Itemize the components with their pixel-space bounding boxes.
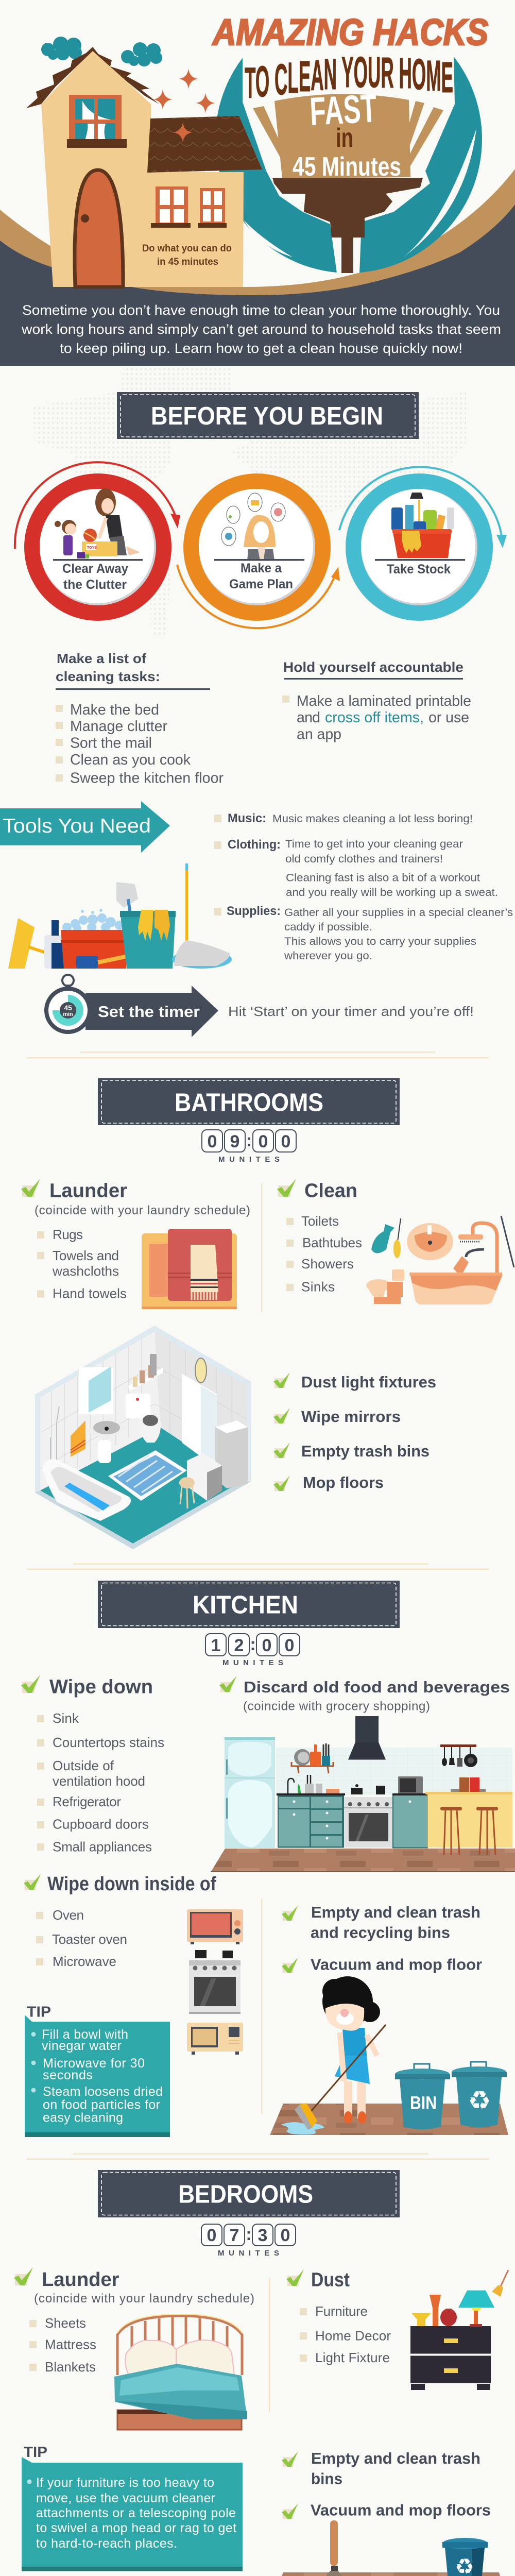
timer: 12:00 minutes: 1 [211, 1636, 220, 1655]
heading: bathrooms: BATHROOMS [175, 1089, 323, 1117]
cabinets [278, 1795, 344, 1848]
step: make a game plan [177, 473, 340, 628]
timer: 09:00 minutes: : [246, 1131, 252, 1150]
counter objects [288, 1778, 294, 1794]
list: tools: Supplies: [227, 904, 281, 918]
panel: launder (bathrooms): Launder [49, 1180, 127, 1201]
panel: wipe down inside of: Microwave [53, 1954, 116, 1969]
illustration: house [26, 37, 262, 287]
tip: vacuum attachments [22, 2444, 243, 2571]
list: tools [214, 811, 513, 962]
illustration: woman and child: TOYS [87, 546, 97, 550]
timer: 09:00 minutes [202, 1130, 296, 1164]
tip: vacuum attachments: to swivel a mop head or rag to get [36, 2521, 236, 2535]
illustration: isometric bathroom [35, 1326, 251, 1549]
list: kitchen chores: Vacuum and mop floor [311, 1956, 482, 1974]
step: clear away the clutter: the Clutter [63, 578, 127, 592]
panel: wipe down inside of: Wipe down inside of [47, 1873, 216, 1895]
step: take stock [339, 467, 507, 621]
panel: launder (bedrooms): Sheets [45, 2315, 86, 2331]
list: tools: Time to get into your cleaning gear [285, 838, 463, 850]
tip: microwave: easy cleaning [43, 2111, 123, 2125]
legs [344, 2081, 352, 2119]
illustration: woman and child [55, 488, 140, 558]
tip: microwave: TIP [27, 2004, 51, 2021]
intro text: to keep piling up. Learn how to get a clean house quickly now! [60, 341, 462, 356]
panel: discard old food: (coincide with grocery shopping) [243, 1699, 430, 1714]
timer: 07:30 minutes: MUNITES [218, 2249, 279, 2258]
arrow: tools you need: Tools You Need [3, 815, 151, 837]
list: tools: caddy if possible. [284, 921, 372, 933]
panel: make a list of cleaning tasks: Make the bed [70, 702, 159, 718]
panel: make a list of cleaning tasks: Make a list of [57, 651, 146, 666]
list: bathroom chores [273, 1372, 436, 1492]
panel: launder (bathrooms): Rugs [53, 1227, 83, 1242]
list: bedroom chores: Vacuum and mop floors [311, 2501, 491, 2519]
sink and towel [85, 1418, 128, 1440]
tip: microwave: Microwave for 30 [43, 2056, 145, 2071]
shelf [291, 1762, 333, 1773]
dotted world map backdrop [31, 367, 466, 637]
panel: wipe down inside of: Oven [53, 1907, 84, 1923]
bin: BIN [410, 2093, 437, 2113]
tip: microwave: vinegar water [42, 2039, 122, 2053]
panel: clean (bathrooms): Clean [304, 1180, 357, 1201]
list: bathroom chores: Wipe mirrors [301, 1408, 401, 1426]
dress [335, 2028, 369, 2081]
list: tools: old comfy clothes and trainers! [285, 853, 443, 865]
timer: 09:00 minutes: 9 [230, 1132, 239, 1151]
heading: bedrooms: BEDROOMS [178, 2180, 313, 2208]
heading: bathrooms [98, 1078, 400, 1125]
panel: clean (bathrooms): Toilets [301, 1213, 339, 1229]
list: bathroom chores: Empty trash bins [301, 1442, 430, 1460]
panel: clean (bathrooms): Sinks [301, 1279, 335, 1294]
icon: microwave [187, 2023, 243, 2055]
list: tools: Gather all your supplies in a special cleaner’s [284, 906, 513, 919]
illustration: mop and bin on wood floor [270, 2520, 508, 2576]
tip: microwave: on food particles for [43, 2098, 160, 2112]
panel: dust (bedrooms): Dust [311, 2269, 350, 2291]
recycle bin [452, 2062, 507, 2127]
panel: hold yourself accountable: or use [428, 709, 469, 726]
panel: make a list of cleaning tasks [56, 651, 224, 787]
list: tools: Cleaning fast is also a bit of a workout [286, 872, 480, 884]
title: in [336, 123, 353, 153]
panel: launder (bathrooms): (coincide with your laundry schedule) [35, 1204, 250, 1217]
list: bedroom chores: Empty and clean trash [311, 2449, 480, 2467]
timer: 12:00 minutes [205, 1634, 300, 1667]
timer: 09:00 minutes: 0 [281, 1132, 290, 1151]
illustration: bucket of cleaning supplies [391, 493, 454, 558]
door [75, 170, 123, 287]
panel: hold yourself accountable: Make a laminated printable [297, 693, 471, 709]
toilet [126, 1394, 150, 1418]
panel: launder (bathrooms) [21, 1179, 250, 1309]
panel: wipe down: Outside of [53, 1758, 114, 1773]
panel: clean (bathrooms): Showers [301, 1256, 354, 1272]
list: kitchen chores: and recycling bins [311, 1924, 450, 1941]
icon: stopwatch and set the timer arrow [44, 975, 218, 1037]
timer: 07:30 minutes: 0 [281, 2226, 290, 2245]
panel: wipe down inside of: Toaster oven [52, 1931, 127, 1947]
heading: before you begin: BEFORE YOU BEGIN [151, 402, 383, 430]
panel: make a list of cleaning tasks: Clean as you cook [70, 752, 191, 768]
house caption: Do what you can do [142, 243, 232, 254]
panel: wipe down inside of [24, 1873, 243, 2055]
timer: 09:00 minutes: MUNITES [218, 1155, 280, 1164]
panel: hold yourself accountable [282, 659, 471, 743]
heading: kitchen [98, 1581, 400, 1628]
panel: launder (bathrooms): Hand towels [53, 1286, 127, 1301]
panel: hold yourself accountable: and [297, 709, 320, 726]
step: clear away the clutter [15, 462, 180, 621]
intro text: work long hours and simply can’t get around to household tasks that seem [21, 321, 501, 337]
title: AMAZING HACKS [212, 12, 488, 53]
step: make a game plan: Make a [241, 561, 282, 575]
list: kitchen chores: Empty and clean trash [311, 1903, 480, 1921]
illustration: bathroom fixtures [366, 1216, 514, 1304]
panel: discard old food: Discard old food and beverages [244, 1678, 510, 1696]
panel: launder (bedrooms) [14, 2267, 254, 2430]
panel: hold yourself accountable: Hold yourself accountable [283, 659, 464, 675]
hood [355, 1716, 379, 1742]
intro text [21, 302, 501, 356]
recycle bin: ♻ [468, 2086, 491, 2115]
lower windows [156, 187, 188, 224]
tip: vacuum attachments: attachments or a telescoping pole [36, 2506, 236, 2520]
panel: launder (bathrooms): washcloths [52, 1263, 119, 1279]
panel: dust (bedrooms): Light Fixture [315, 2350, 390, 2365]
list: bathroom chores: Dust light fixtures [301, 1373, 436, 1391]
timer: 07:30 minutes: 7 [230, 2226, 239, 2245]
timer: 12:00 minutes: 0 [285, 1636, 294, 1655]
panel: dust (bedrooms): Furniture [315, 2303, 368, 2319]
title [212, 12, 488, 182]
panel: launder (bedrooms): (coincide with your laundry schedule) [34, 2292, 254, 2306]
timer: 07:30 minutes: : [246, 2225, 252, 2244]
fridge [225, 1737, 275, 1848]
head [322, 1976, 373, 2027]
illustration: woman mopping with bins [270, 1976, 508, 2135]
list: tools: This allows you to carry your supplies [284, 935, 476, 947]
panel: clean (bathrooms): Bathtubes [302, 1235, 362, 1250]
tip: microwave: Steam loosens dried [43, 2084, 163, 2099]
icon: stopwatch and set the timer arrow: Set the timer [98, 1003, 200, 1021]
tip: vacuum attachments: If your furniture is too heavy to [36, 2476, 214, 2490]
panel: hold yourself accountable: an app [297, 726, 341, 743]
timer: 07:30 minutes: 0 [207, 2226, 216, 2245]
panel: wipe down: Countertops stains [53, 1735, 164, 1750]
step: take stock: Take Stock [387, 562, 451, 577]
timer: 09:00 minutes: 0 [259, 1132, 268, 1151]
step: make a game plan: Game Plan [229, 577, 293, 591]
panel: wipe down: Sink [53, 1710, 79, 1726]
illustration: woman with thought bubbles [221, 493, 285, 561]
bin [395, 2064, 450, 2129]
illustration: folded towels [142, 1229, 237, 1309]
list: tools: Clothing: [228, 838, 281, 852]
icon: toaster oven [187, 1909, 243, 1944]
tip: vacuum attachments: move, use the vacuum cleaner [36, 2491, 215, 2505]
tip: vacuum attachments: to hard-to-reach places. [36, 2536, 177, 2551]
illustration: nightstand [410, 2270, 508, 2390]
panel: dust (bedrooms) [286, 2269, 508, 2390]
clouds [41, 37, 162, 66]
panel: hold yourself accountable: cross off items, [325, 709, 424, 726]
heading: kitchen: KITCHEN [193, 1591, 298, 1619]
house caption: in 45 minutes [157, 257, 218, 267]
window and shelf [79, 1367, 113, 1414]
panel: wipe down: Refrigerator [53, 1794, 121, 1809]
timer: 12:00 minutes: MUNITES [222, 1658, 283, 1667]
list: bedroom chores: bins [311, 2470, 342, 2488]
panel: make a list of cleaning tasks: Sort the mail [70, 735, 152, 751]
timer: 12:00 minutes: 2 [234, 1636, 244, 1655]
panel: launder (bedrooms): Blankets [45, 2359, 96, 2375]
list: bathroom chores: Mop floors [303, 1473, 384, 1492]
rug [108, 1450, 187, 1501]
panel: wipe down: ventilation hood [53, 1773, 145, 1789]
stool [179, 1477, 195, 1488]
bar and stools [427, 1793, 512, 1848]
illustration: kitchen [211, 1716, 515, 1872]
list: tools: and you really will be working up a sweat. [286, 886, 498, 899]
timer: 12:00 minutes: : [250, 1635, 256, 1654]
timer: 07:30 minutes: 3 [258, 2226, 267, 2245]
stove [344, 1797, 392, 1848]
panel: wipe down: Small appliances [53, 1839, 152, 1855]
bathtub [42, 1459, 131, 1521]
house caption [142, 243, 232, 267]
upper window [69, 95, 122, 142]
icon: stopwatch and set the timer arrow: 45 [64, 1004, 72, 1012]
hero background band [0, 169, 515, 366]
panel: discard old food [219, 1676, 510, 1714]
text: hit start: Hit ‘Start’ on your timer and you’re off! [228, 1004, 474, 1019]
icon: stopwatch and set the timer arrow: min [63, 1011, 73, 1018]
illustration: cleaning supplies [8, 863, 232, 969]
panel: clean (bathrooms) [277, 1179, 514, 1304]
icon: oven [189, 1950, 241, 2014]
utensil rack [440, 1744, 476, 1747]
intro text: Sometime you don’t have enough time to clean your home thoroughly. You [22, 302, 500, 318]
list: tools: Music: [228, 811, 266, 825]
timer: 07:30 minutes [201, 2224, 296, 2258]
heading: bedrooms [98, 2170, 400, 2217]
title: 45 Minutes [293, 152, 401, 182]
panel: wipe down: Wipe down [49, 1676, 153, 1698]
panel: make a list of cleaning tasks: cleaning tasks: [56, 669, 160, 684]
panel: launder (bedrooms): Mattress [45, 2337, 96, 2352]
heading: before you begin [117, 392, 419, 439]
timer: 12:00 minutes: 0 [262, 1636, 271, 1655]
list: tools: wherever you go. [284, 950, 372, 962]
tip: vacuum attachments: TIP [24, 2444, 47, 2461]
tip: microwave: seconds [43, 2068, 93, 2082]
step: clear away the clutter: Clear Away [62, 562, 128, 576]
list: kitchen chores [282, 1903, 482, 1974]
timer: 09:00 minutes: 0 [208, 1132, 217, 1151]
panel: make a list of cleaning tasks: Sweep the kitchen floor [70, 770, 224, 787]
illustration: bed [114, 2314, 247, 2430]
panel: make a list of cleaning tasks: Manage clutter [70, 718, 168, 735]
panel: wipe down: Cupboard doors [53, 1817, 149, 1832]
panel: dust (bedrooms): Home Decor [315, 2328, 391, 2343]
suds [62, 909, 124, 933]
tip: microwave: Fill a bowl with [42, 2027, 128, 2042]
title: TO CLEAN YOUR HOME [245, 48, 453, 107]
illustration: broom in teal oval [211, 0, 489, 273]
arrow: tools you need [0, 801, 170, 853]
panel: launder (bedrooms): Launder [42, 2269, 119, 2291]
tip: microwave [25, 2004, 170, 2137]
list: bedroom chores [282, 2449, 491, 2519]
list: tools: Music makes cleaning a lot less boring! [272, 812, 473, 825]
panel: launder (bathrooms): Towels and [53, 1248, 119, 1263]
panel: wipe down [21, 1675, 164, 1855]
title: FAST [308, 86, 378, 134]
door and cabinets [182, 1374, 217, 1468]
